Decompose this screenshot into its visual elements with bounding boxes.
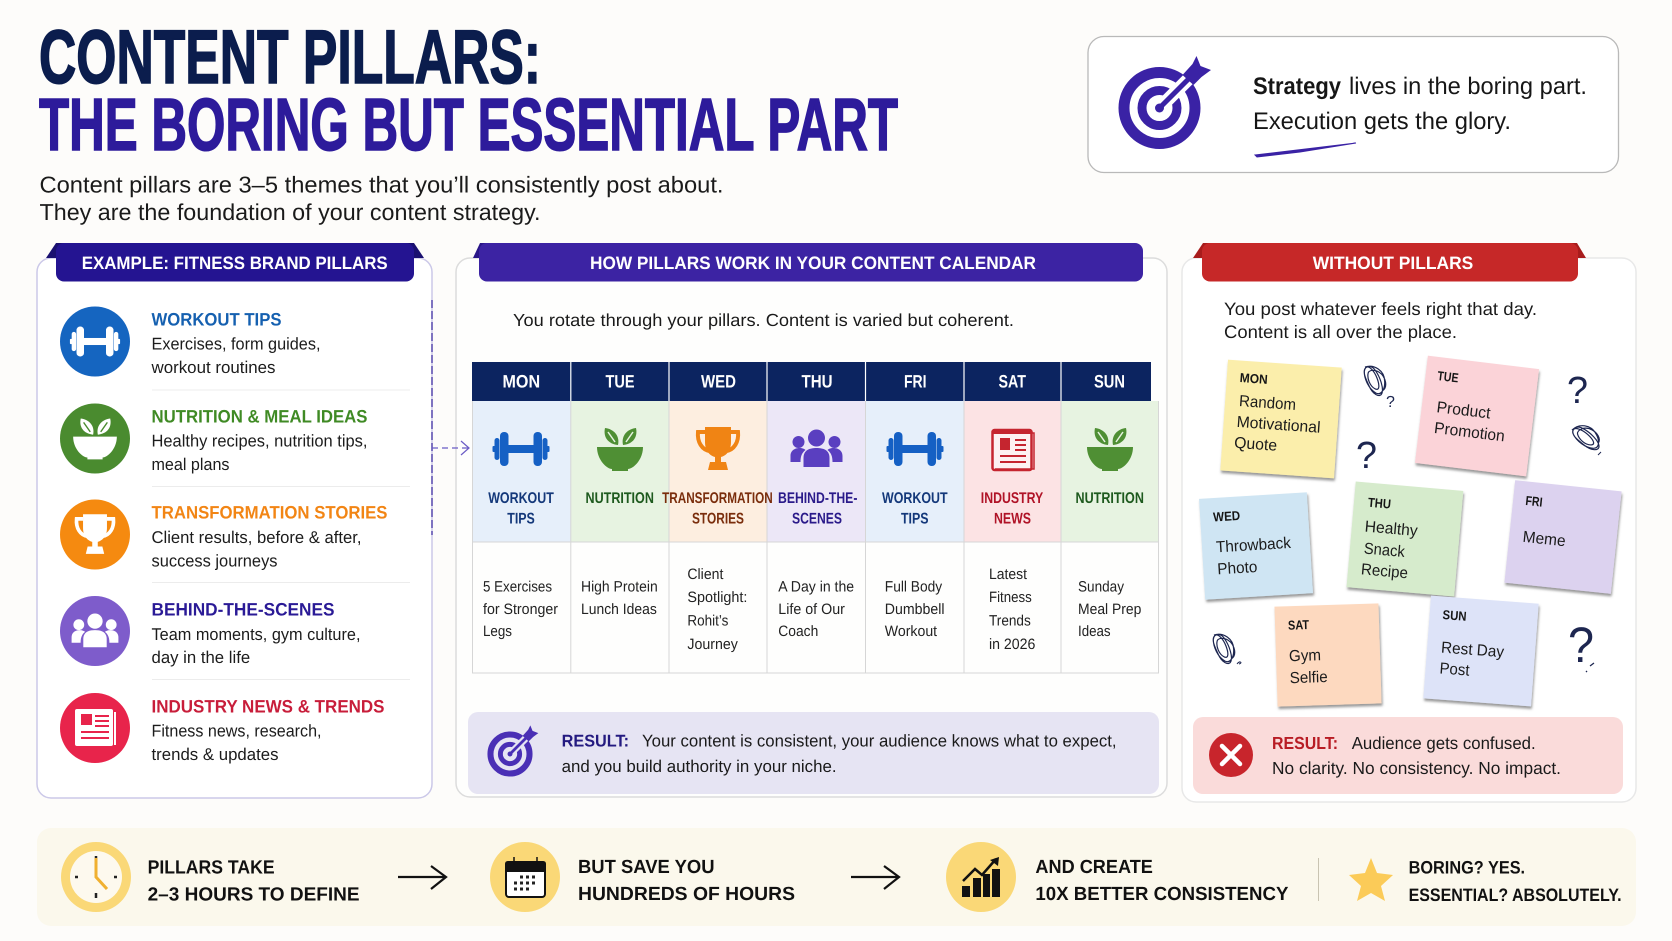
calendar table (472, 362, 1159, 673)
pillar: industry news and trends: trends & updates (152, 745, 278, 764)
sticky note: tue: Promotion (1433, 420, 1506, 445)
table header row: TUE (606, 372, 634, 392)
callout: negative result (1193, 717, 1623, 794)
sticky note: thu: Snack (1363, 540, 1406, 561)
column: friday workout tips: Dumbbell (885, 601, 944, 618)
step: 10x better consistency (946, 842, 1289, 912)
sticky note: mon: Quote (1234, 435, 1278, 455)
sticky note: mon: MON (1239, 370, 1268, 387)
column: wednesday transformation stories: Rohit’s (687, 613, 728, 630)
pillar: transformation stories: TRANSFORMATION STORIES (152, 502, 388, 522)
subtitle: They are the foundation of your content strategy. (40, 199, 540, 225)
callout: strategy quote (1088, 36, 1618, 172)
quote text: lives in the boring part. (1349, 73, 1587, 100)
pillar: workout tips: workout routines (151, 358, 276, 377)
column: friday workout tips: TIPS (901, 511, 928, 528)
column: friday workout tips: WORKOUT (882, 490, 948, 507)
column: tuesday nutrition: NUTRITION (586, 490, 654, 507)
doodles: scribbles and question marks (1205, 362, 1602, 673)
quote text (1253, 73, 1587, 135)
arrow (398, 866, 446, 889)
table header row: FRI (904, 372, 926, 392)
banner: without pillars: WITHOUT PILLARS (1313, 253, 1473, 273)
arrow (851, 866, 899, 889)
banner: how pillars work: HOW PILLARS WORK IN YOUR CONTENT CALENDAR (590, 253, 1036, 273)
closing statement (1349, 858, 1622, 905)
sticky note: sat: Selfie (1289, 669, 1328, 687)
pillar: behind the scenes: day in the life (152, 648, 250, 667)
sticky note: fri: FRI (1525, 493, 1543, 510)
pillar: workout tips: Exercises, form guides, (152, 334, 320, 354)
title: CONTENT PILLARS: (39, 15, 541, 100)
panel: how pillars work in your content calendar (456, 243, 1167, 797)
column: saturday industry news: Latest (989, 566, 1028, 583)
icon: target with arrow (1124, 56, 1211, 144)
column: monday workout tips: TIPS (507, 511, 535, 528)
column: tuesday nutrition: Lunch Ideas (581, 601, 657, 618)
callout: negative result: No clarity. No consistency. No impact. (1272, 758, 1561, 778)
column: thursday behind the scenes: Coach (778, 623, 818, 640)
step: save hundreds of hours (490, 842, 795, 912)
intro text: Content is all over the place. (1224, 322, 1457, 342)
step: 10x better consistency: 10X BETTER CONSISTENCY (1035, 884, 1289, 905)
sticky note: wed (1199, 492, 1313, 600)
pillar: transformation stories (60, 500, 388, 570)
column: saturday industry news: NEWS (994, 511, 1031, 528)
column: friday workout tips: Full Body (885, 579, 943, 596)
step: pillars take 2-3 hours: PILLARS TAKE (148, 858, 275, 878)
column: wednesday transformation stories: Spotlight: (687, 589, 747, 606)
pillar: workout tips: WORKOUT TIPS (152, 310, 282, 330)
column: saturday industry news: INDUSTRY (981, 490, 1044, 507)
column: thursday behind the scenes: BEHIND-THE- (778, 490, 857, 507)
pillar: behind the scenes: BEHIND-THE-SCENES (152, 600, 334, 620)
sticky note: sat (1274, 603, 1382, 707)
title (39, 15, 898, 166)
sticky note: tue (1415, 356, 1539, 476)
pillar: behind the scenes (60, 596, 360, 667)
arrow: dashed connector from pillars to calendar (432, 300, 469, 535)
sticky note: sat: SAT (1288, 617, 1309, 633)
banner: without pillars (1193, 243, 1586, 282)
icon: small target (490, 725, 538, 774)
step: save hundreds of hours: BUT SAVE YOU (578, 857, 714, 878)
column: thursday behind the scenes (778, 430, 857, 640)
pillar: industry news and trends (60, 693, 384, 764)
sticky note: thu (1346, 481, 1463, 597)
step: 10x better consistency: AND CREATE (1035, 857, 1153, 878)
column: sunday nutrition: Sunday (1078, 579, 1124, 596)
pillar: transformation stories: success journeys (152, 552, 278, 570)
panel: example fitness brand pillars (37, 243, 432, 798)
sticky note: wed: WED (1213, 508, 1241, 525)
column: saturday industry news: Trends (989, 613, 1031, 630)
column: monday workout tips: 5 Exercises (483, 579, 552, 596)
step: save hundreds of hours: HUNDREDS OF HOURS (578, 884, 795, 905)
subtitle: Content pillars are 3–5 themes that you’ll consistently post about. (40, 172, 724, 198)
bottom bar (37, 828, 1636, 926)
sticky note: tue: TUE (1437, 368, 1460, 385)
callout: negative result: Audience gets confused. (1352, 733, 1536, 753)
column: wednesday transformation stories (662, 427, 773, 653)
column: thursday behind the scenes: SCENES (792, 511, 842, 528)
subtitle (40, 172, 724, 225)
pillar: nutrition and meal ideas: Healthy recipes, nutrition tips, (152, 432, 368, 450)
step: pillars take 2-3 hours (61, 842, 360, 912)
banner: example fitness brand pillars (46, 243, 424, 282)
pillar: behind the scenes: Team moments, gym culture, (152, 625, 360, 644)
step: pillars take 2-3 hours: 2–3 HOURS TO DEFINE (148, 884, 360, 906)
title: THE BORING BUT ESSENTIAL PART (39, 83, 898, 166)
sticky note: wed: Photo (1217, 559, 1258, 578)
quote text: Execution gets the glory. (1253, 108, 1511, 135)
panel: without pillars (1182, 243, 1636, 802)
callout: positive result: and you build authority in your niche. (562, 757, 837, 776)
column: monday workout tips: WORKOUT (488, 490, 554, 507)
icon: red cross (1209, 733, 1253, 777)
intro text: You rotate through your pillars. Content is varied but coherent. (513, 310, 1014, 330)
column: tuesday nutrition (581, 428, 658, 618)
icon: calendar (490, 842, 560, 912)
column: thursday behind the scenes: A Day in the (778, 579, 854, 596)
column: saturday industry news: Fitness (989, 589, 1032, 606)
column: monday workout tips: for Stronger (483, 601, 558, 618)
closing statement: BORING? YES. (1409, 858, 1525, 878)
table header row: SUN (1094, 372, 1125, 392)
sticky note: fri: Meme (1522, 529, 1566, 550)
sticky note: mon: Motivational (1236, 414, 1321, 437)
callout: negative result: RESULT: (1272, 733, 1338, 753)
column: wednesday transformation stories: STORIES (692, 511, 744, 528)
callout: positive result: RESULT: (562, 732, 629, 751)
sticky note: sun: Rest Day (1440, 640, 1505, 661)
sticky note: thu: Recipe (1360, 561, 1409, 582)
column: wednesday transformation stories: Client (687, 566, 724, 583)
doodles: scribbles and question marks: ? (1567, 370, 1588, 412)
intro text: You post whatever feels right that day. (1224, 299, 1537, 319)
sticky note: sun (1423, 596, 1539, 706)
table header row: WED (701, 372, 736, 392)
hand-drawn underline (1255, 143, 1356, 157)
table column tints (472, 401, 1159, 673)
sticky note: mon (1220, 360, 1342, 478)
quote text: Strategy (1253, 73, 1342, 100)
banner: example fitness brand pillars: EXAMPLE: FITNESS BRAND PILLARS (82, 253, 388, 273)
column: saturday industry news: in 2026 (989, 636, 1035, 653)
column: wednesday transformation stories: TRANSFORMATION (662, 490, 773, 507)
icon: clock (61, 842, 131, 912)
pillar: industry news and trends: Fitness news, research, (152, 722, 322, 740)
doodles: scribbles and question marks: ? (1568, 617, 1594, 673)
sticky note: wed: Throwback (1216, 535, 1292, 556)
icon: star (1349, 858, 1393, 901)
pillar: industry news and trends: INDUSTRY NEWS & TRENDS (152, 696, 384, 716)
table header row: THU (802, 372, 832, 392)
doodles: scribbles and question marks: ? (1356, 435, 1377, 477)
sticky note: thu: THU (1367, 495, 1392, 512)
doodles: scribbles and question marks: ? (1386, 394, 1395, 411)
column: friday workout tips: Workout (885, 623, 938, 640)
column: sunday nutrition: Meal Prep (1078, 601, 1141, 618)
column: sunday nutrition: Ideas (1078, 623, 1111, 640)
column: sunday nutrition (1076, 428, 1144, 640)
pillar: nutrition and meal ideas (60, 404, 368, 474)
pillar: nutrition and meal ideas: NUTRITION & MEAL IDEAS (152, 406, 368, 426)
intro text (1224, 299, 1537, 342)
callout: positive result (468, 712, 1159, 794)
callout: positive result: Your content is consistent, your audience knows what to expect, (642, 732, 1117, 751)
table header row: MON (502, 372, 540, 392)
sticky note: thu: Healthy (1364, 518, 1418, 540)
column: tuesday nutrition: High Protein (581, 579, 658, 596)
column: saturday industry news (981, 430, 1044, 653)
icon: growth chart (946, 842, 1016, 912)
closing statement: ESSENTIAL? ABSOLUTELY. (1409, 885, 1622, 905)
sticky note: sun: Post (1439, 660, 1471, 680)
pillar: workout tips (60, 306, 320, 377)
sticky note: fri (1504, 480, 1622, 594)
sticky note: sun: SUN (1442, 607, 1467, 624)
column: monday workout tips (483, 432, 558, 640)
column: wednesday transformation stories: Journey (687, 636, 738, 653)
pillar: nutrition and meal ideas: meal plans (152, 455, 230, 474)
pillar: transformation stories: Client results, before & after, (152, 528, 362, 547)
sticky note: sat: Gym (1289, 647, 1321, 665)
table header row (472, 362, 1151, 401)
sticky note: mon: Random (1239, 393, 1297, 414)
column: friday workout tips (882, 432, 948, 640)
sticky note: tue: Product (1436, 399, 1492, 423)
column: monday workout tips: Legs (483, 623, 512, 640)
table header row: SAT (998, 372, 1026, 392)
banner: how pillars work (473, 243, 1143, 282)
column: sunday nutrition: NUTRITION (1076, 490, 1144, 507)
column: thursday behind the scenes: Life of Our (778, 601, 845, 618)
